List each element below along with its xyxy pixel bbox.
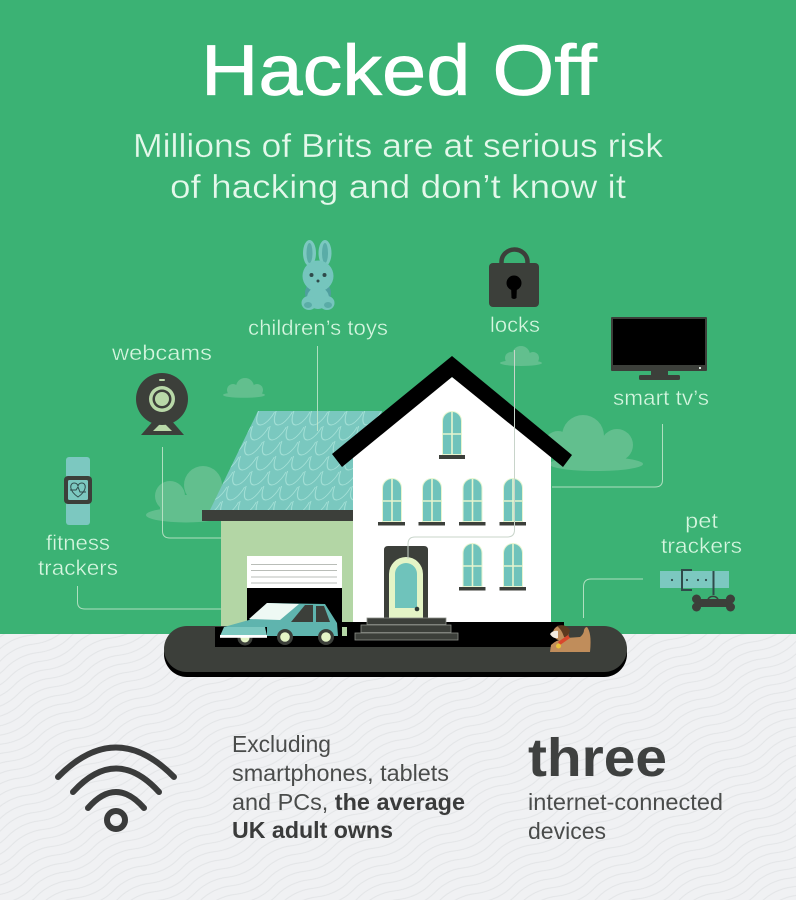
cloud: large left: [146, 466, 234, 522]
label: pet trackers: [661, 510, 742, 558]
title: Hacked Off: [201, 32, 597, 111]
house foundation: [215, 622, 564, 647]
locks connector line: [408, 350, 514, 559]
label: webcams: webcams: [111, 342, 212, 365]
icon: fitness tracker: [64, 457, 92, 525]
patterned ground: [0, 634, 796, 900]
icon: pet collar and bone: [660, 570, 735, 612]
icon: smart tv: [611, 317, 707, 380]
label: locks: locks: [490, 314, 540, 337]
house wall: [353, 377, 551, 622]
front steps: [355, 618, 458, 640]
garage wall: [221, 521, 354, 627]
icon: bunny toy: [302, 240, 334, 310]
cloud: small right: [500, 346, 542, 366]
green background: [0, 0, 796, 634]
text: average UK adult: UK adult owns: [232, 817, 393, 843]
subtitle: Millions of Brits are at serious risk: [133, 127, 664, 164]
stat: three: three: [528, 728, 667, 788]
connector lines: [78, 346, 662, 618]
lower window row: [459, 543, 526, 590]
car: [220, 603, 338, 646]
garage door: [247, 556, 342, 636]
subtitle: [133, 127, 664, 205]
label: fitness trackers: [38, 532, 118, 580]
label: pet trackers: trackers: [661, 535, 742, 558]
cloud: large right: [544, 415, 643, 471]
garage eave: [202, 510, 354, 521]
garage roof: [210, 411, 382, 510]
label: fitness trackers: trackers: [38, 557, 118, 580]
text: internet-connected devices: internet-connected: [528, 789, 723, 815]
front door: [384, 546, 428, 618]
cloud: small left: [223, 378, 265, 398]
label: pet trackers: pet: [685, 510, 718, 533]
text: average UK adult: Excluding: [232, 731, 331, 757]
icon: wifi: [58, 748, 174, 829]
text: internet-connected devices: devices: [528, 818, 606, 844]
text: average UK adult: and PCs, the average: [232, 789, 465, 815]
subtitle: of hacking and don’t know it: [170, 168, 626, 205]
platform base: [164, 626, 627, 677]
house roof: [332, 356, 572, 467]
text: average UK adult: smartphones, tablets: [232, 760, 449, 786]
label: smart tv's: smart tv’s: [613, 387, 709, 410]
label: fitness trackers: fitness: [46, 532, 110, 555]
label: children's toys: children’s toys: [248, 317, 388, 340]
upper window row: [378, 478, 526, 526]
garage wall sliver: [342, 627, 347, 636]
top window: [439, 411, 465, 459]
text: average UK adult: [232, 731, 465, 843]
dog: [550, 625, 591, 652]
icon: padlock: [489, 249, 539, 307]
text: internet-connected devices: [528, 789, 723, 844]
icon: webcam: [136, 373, 188, 435]
